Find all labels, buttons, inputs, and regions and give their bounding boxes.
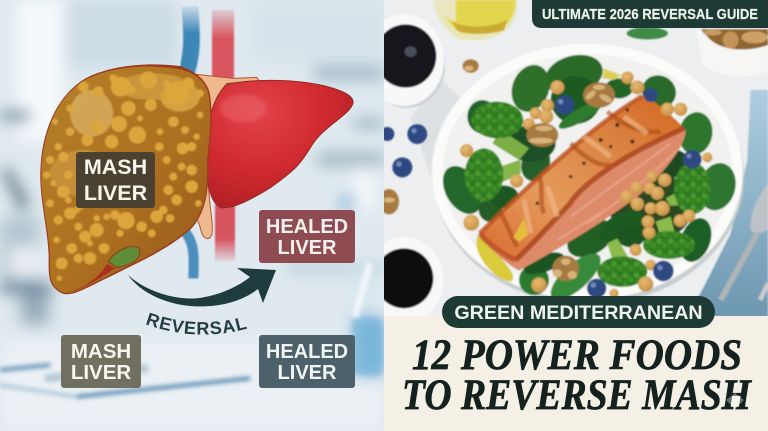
label: healed liver red: LIVER xyxy=(278,237,337,259)
blue napkin xyxy=(698,89,768,316)
spinach leaf near banner xyxy=(627,27,668,39)
spinach leaves xyxy=(435,49,741,307)
soy cup bottom xyxy=(365,237,443,323)
panel: cream title block xyxy=(384,316,768,431)
label: healed liver red xyxy=(259,210,355,263)
salmon fillet xyxy=(480,96,686,271)
blood vessels xyxy=(183,7,235,278)
label: MASH liver on organ: MASH xyxy=(84,155,147,179)
marble shadow xyxy=(411,82,459,177)
label: MASH liver lower xyxy=(61,335,141,388)
panel: food photo xyxy=(364,0,768,323)
label: MASH liver lower: LIVER xyxy=(71,361,131,384)
label: healed liver lower xyxy=(259,335,355,388)
title: 12 power foods to reverse MASH xyxy=(402,332,752,419)
fatty brown lobe xyxy=(40,64,212,294)
walnuts xyxy=(379,59,615,281)
arrow: reversal xyxy=(128,268,276,306)
banner: ultimate guide xyxy=(532,0,768,28)
liver diagram xyxy=(40,7,353,294)
walnut bowl xyxy=(697,29,768,77)
curved label: reversal: REVERSAL xyxy=(146,312,247,334)
clipboard on desk xyxy=(0,263,381,397)
panel: lab background with liver diagram xyxy=(0,0,384,431)
title: 12 power foods to reverse MASH: 12 POWER FOODS xyxy=(412,332,742,379)
label: MASH liver on organ: LIVER xyxy=(84,181,148,205)
broccoli xyxy=(465,102,711,287)
gallbladder xyxy=(108,247,140,267)
healthy red lobe xyxy=(207,80,353,208)
plate xyxy=(432,44,744,305)
chickpeas xyxy=(460,71,712,298)
oil drizzle xyxy=(476,237,513,282)
red underside xyxy=(70,264,115,293)
label: healed liver lower: LIVER xyxy=(278,362,337,384)
label: healed liver lower: HEALED xyxy=(266,341,348,363)
fat deposits xyxy=(43,71,204,281)
pill: green mediterranean xyxy=(442,296,715,328)
blurred laboratory background xyxy=(0,0,384,431)
pill: green mediterranean: GREEN MEDITERRANEAN xyxy=(454,302,703,324)
fork xyxy=(721,183,768,300)
red lobe highlight xyxy=(220,94,267,122)
label: healed liver red: HEALED xyxy=(266,216,348,238)
ligament xyxy=(187,74,260,239)
olive oil glass xyxy=(434,0,517,40)
soy cup top xyxy=(384,14,446,108)
watermark sparkle xyxy=(726,393,744,409)
label: MASH liver lower: MASH xyxy=(71,340,131,363)
label: MASH liver on organ xyxy=(76,152,155,208)
blueberries xyxy=(380,88,702,298)
